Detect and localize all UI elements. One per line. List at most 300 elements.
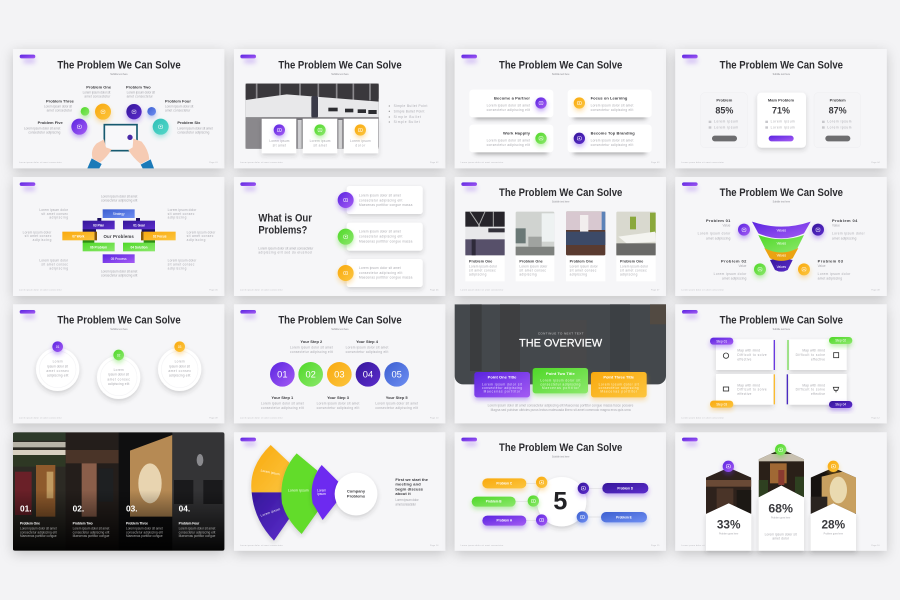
heading: Problems? (258, 224, 308, 236)
funnel labels: Problem 01 (706, 218, 731, 223)
numbered circles: 05 (391, 370, 402, 380)
plan card 87%: 87% (829, 105, 847, 115)
surrounding notes: Lorem ipsum dolor (23, 230, 51, 234)
slide 7: four photo cards: Lorem ipsum dolor sit amet consectetur (461, 289, 504, 292)
column captions: consectetur adipiscing elit (73, 530, 109, 534)
circle three (158, 341, 201, 391)
slide 10: five steps (234, 304, 445, 423)
slide 3: four cards: Page 03 (651, 162, 660, 164)
house 33% (706, 461, 751, 551)
fan segments (251, 445, 338, 541)
hub circle with 5 (537, 477, 586, 526)
photo captions: Problem One (620, 259, 643, 263)
step labels: consectetur adipiscing elit (375, 406, 418, 410)
funnel labels: amet adipiscing (832, 236, 857, 240)
funnel labels: Problem 04 (832, 218, 858, 223)
slide 8: funnel: Subtitle text here (773, 201, 791, 204)
column captions: consectetur adipiscing elit (179, 530, 215, 534)
title: The Problem We Can Solve (720, 59, 843, 71)
cross of colored bars: 01 Goal (133, 223, 145, 227)
four cards: Lorem ipsum dolor sit amet (591, 138, 633, 142)
three text cards with icons: consectetur adipiscing elit (359, 271, 402, 275)
slide 3: four cards (455, 49, 666, 168)
three text cards with icons: Lorem ipsum dolor sit amet (359, 230, 401, 234)
house 68%: Problem goes here (771, 517, 791, 520)
four cards: Focus on Learning (591, 95, 628, 100)
problem labels: amet consectetur (127, 94, 153, 98)
house 68% (759, 444, 804, 551)
numbered circles: 02 (305, 370, 316, 380)
step labels: Lorem ipsum dolor sit amet (290, 346, 333, 350)
problem labels: Lorem ipsum dolor sit amet (24, 126, 60, 130)
photo 1 (465, 212, 505, 281)
three colored cards: consectetur adipiscing (599, 386, 639, 390)
photo columns (13, 432, 224, 551)
photo captions: sit amet consec (519, 268, 546, 272)
circle three: ipsum dolor sit (169, 364, 190, 368)
cards (716, 339, 847, 405)
slide 5: our problems cross diagram: Lorem ipsum dolor sit amet consectetur (19, 289, 62, 292)
problem pills: Problem B (486, 500, 502, 504)
surrounding notes: Lorem ipsum dolor (39, 258, 68, 262)
three text cards with icons: consectetur adipiscing elit (359, 235, 402, 239)
circle two: Lorem (114, 368, 124, 372)
slide 4: three percentage plans: Subtitle text here (773, 73, 791, 76)
slide 13: four dark photo columns (13, 432, 224, 551)
funnel labels: Lorem ipsum dolor (832, 232, 865, 236)
column captions: 02. (73, 504, 84, 514)
slide 9: three circles: Subtitle text here (110, 328, 128, 331)
slide 15: number five hub: Subtitle text here (552, 456, 570, 459)
problem pills: Problem C (496, 481, 513, 485)
card text: Map with mind (802, 349, 825, 353)
funnel labels: amet adipiscing (818, 277, 842, 281)
slide 12: four step cards: Subtitle text here (773, 328, 791, 331)
heading: adipiscing elit sed do eiusmod (258, 251, 312, 255)
cross of colored bars: 07 Work (72, 234, 85, 238)
circle one: 01 (56, 345, 60, 349)
overview heading (519, 332, 602, 350)
surrounding notes: sit amet consec (25, 234, 52, 238)
step labels: consectetur adipiscing elit (346, 350, 388, 354)
surrounding notes: Lorem ipsum dolor (187, 230, 215, 234)
house 28%: Problem goes here (824, 533, 844, 536)
cross of colored bars: 02 Focus (153, 234, 167, 238)
slide 9: three circles: Page 09 (209, 417, 219, 419)
house 33%: Problem goes here (719, 533, 739, 536)
three white cards: sit amet (273, 143, 286, 147)
slide 4: three percentage plans (675, 49, 887, 168)
cross of colored bars: 06 Problem (90, 245, 107, 249)
fan segments: Lorem ipsum (260, 507, 281, 518)
cross of colored bars (62, 209, 176, 263)
photo captions: Problem One (519, 259, 543, 263)
step pills: Step 01 (716, 339, 727, 343)
slide 12: four step cards: Page 12 (871, 417, 880, 419)
bullet list: Simple Bullet (394, 120, 420, 124)
funnel bands: Values (777, 265, 786, 269)
slide 11: the overview (455, 304, 666, 423)
step pills (710, 337, 852, 408)
plan card 85%: Lorem ipsum (714, 120, 738, 124)
three colored cards (474, 368, 647, 397)
card text: effective (737, 392, 752, 396)
surrounding notes: adipiscing (49, 266, 68, 270)
slide 16: three house photos with percentages: Lorem ipsum dolor sit (681, 544, 705, 547)
top two rows of slides, left pair (13, 49, 445, 296)
four cards: consectetur adipiscing elit (487, 143, 530, 147)
surrounding notes: Lorem ipsum dolor (168, 258, 196, 262)
step pills: Step 02 (835, 339, 846, 343)
plan card 85% (701, 93, 747, 148)
photo captions: adipiscing (469, 272, 487, 276)
hub icons (528, 477, 589, 526)
title: The Problem We Can Solve (57, 315, 181, 327)
plan card 85%: Problem (716, 97, 733, 102)
title: The Problem We Can Solve (278, 59, 402, 71)
problem labels: Lorem ipsum dolor sit (165, 104, 193, 108)
problem labels: Lorem ipsum dolor sit amet (177, 126, 213, 130)
four cards: consectetur adipiscing elit (591, 108, 633, 112)
surrounding notes: Lorem ipsum dolor (168, 208, 196, 212)
slide 15: number five hub (455, 432, 666, 551)
slide 1: problem circles around tablet: Page 01 (209, 162, 218, 164)
photo captions: sit amet consec (620, 268, 647, 272)
funnel bands: Values (777, 242, 786, 246)
slide 9: three circles (13, 304, 224, 423)
four cards: Lorem ipsum dolor sit amet (487, 103, 530, 107)
problem labels: Lorem ipsum dolor sit (83, 90, 110, 94)
three text cards with icons: consectetur adipiscing elit (359, 198, 402, 202)
surrounding notes: adipiscing (49, 216, 68, 220)
problem pills: Problem E (616, 515, 632, 519)
photo 2 (516, 212, 554, 281)
card text: Difficult to solve (796, 353, 825, 357)
slide 8: funnel: Page 08 (871, 290, 881, 292)
column captions: 04. (179, 504, 190, 514)
funnel labels: amet adipiscing (706, 236, 731, 240)
three white cards: sit amet (313, 143, 327, 147)
problem labels: Problem One (86, 84, 112, 89)
three colored cards: Lorem ipsum dolor sit (540, 379, 580, 383)
problem labels: amet consectetur (47, 108, 72, 112)
funnel labels: Value (722, 224, 731, 228)
plan card 71% (757, 93, 806, 148)
surrounding notes: sit amet consec (41, 212, 68, 216)
column captions: Maecenas porttitor congue (73, 534, 110, 538)
problem labels: Problem Two (126, 84, 151, 89)
photo captions: sit amet consec (469, 268, 496, 272)
three white cards: Lorem ipsum (350, 139, 371, 143)
center circle (335, 473, 377, 515)
four cards (469, 90, 652, 154)
connectors (516, 483, 602, 521)
bottom two rows of slides, right pair (455, 304, 887, 551)
problem labels: Problem Six (177, 120, 201, 125)
slide 8: funnel (675, 177, 887, 296)
slide 7: four photo cards: Page 07 (651, 290, 659, 292)
card text: Map with mind (737, 383, 760, 387)
circle three: 03 (178, 345, 182, 349)
photo captions: adipiscing (519, 272, 537, 276)
house 28% (811, 461, 856, 551)
four cards: consectetur adipiscing elit (591, 143, 633, 147)
four cards: Lorem ipsum dolor sit amet (487, 138, 530, 142)
column captions: consectetur adipiscing elit (126, 530, 163, 534)
funnel labels: Lorem ipsum dolor (818, 272, 850, 276)
icon circles (71, 104, 169, 135)
bullet list: Simple Bullet Point (394, 104, 427, 108)
step labels: Lorem ipsum dolor sit amet (317, 401, 359, 405)
plan card 87% (814, 93, 861, 148)
fan segments: Lorem (317, 488, 327, 492)
slide 7: four photo cards: Subtitle text here (552, 201, 570, 204)
three white cards: dolor (355, 143, 365, 147)
slide 15: number five hub: Lorem ipsum dolor sit amet consectetur (461, 544, 504, 547)
card icons (723, 353, 839, 392)
circle two: ipsum dolor sit (108, 373, 129, 377)
three text cards with icons (338, 186, 423, 287)
column captions: Problem One (20, 522, 40, 526)
slide 4: three percentage plans: Lorem ipsum dolor sit amet consectetur (681, 161, 724, 164)
bottom two rows of slides, left pair (13, 304, 445, 551)
funnel labels: Value (832, 224, 840, 228)
circle one: amet consec (46, 369, 69, 373)
photo captions: Lorem ipsum dolor (620, 265, 648, 269)
surrounding notes: sit amet consec (187, 234, 214, 238)
funnel labels: Problem 03 (818, 258, 844, 263)
three white cards: Lorem ipsum (269, 139, 290, 143)
numbered circles: 03 (334, 370, 345, 380)
card text: effective (737, 357, 752, 361)
funnel bands: Values (777, 253, 786, 257)
plan card 87%: Problem (830, 97, 846, 102)
column captions: Problem Two (73, 522, 93, 526)
circle one: Lorem (53, 360, 63, 364)
circle two: 02 (117, 353, 121, 357)
side text (395, 477, 429, 506)
circle three: adipiscing elit (169, 374, 190, 378)
title: The Problem We Can Solve (499, 442, 622, 454)
top two rows of slides, right pair (455, 49, 887, 296)
four cards: Lorem ipsum dolor sit amet (591, 103, 633, 107)
side text: Lorem ipsum dolor (395, 498, 419, 502)
photo captions: Lorem ipsum dolor (570, 265, 598, 269)
photo captions: Lorem ipsum dolor (469, 265, 497, 269)
slide 10: five steps: Page 10 (430, 417, 439, 419)
problem labels: Problem Five (38, 120, 63, 125)
bottom note (488, 404, 634, 412)
plan card 87%: Lorem ipsum (827, 125, 852, 129)
plan card 71%: Main Problem (768, 97, 795, 102)
numbered circles (270, 362, 409, 387)
house 68%: 68% (768, 502, 793, 516)
step labels: Lorem ipsum dolor sit amet (375, 401, 418, 405)
fan segments: Lorem ipsum (260, 468, 280, 476)
card text (737, 349, 825, 396)
circle three: amet consec (168, 369, 191, 373)
photo captions: sit amet consec (570, 268, 597, 272)
photo captions: Problem One (570, 259, 593, 263)
funnel bands: Values (777, 229, 786, 233)
title: The Problem We Can Solve (499, 59, 622, 71)
funnel labels (698, 218, 865, 281)
circle one (36, 341, 79, 391)
three text cards with icons: Maecenas porttitor congue massa (359, 203, 413, 207)
center label: Our Problems (103, 234, 134, 239)
side text: about it (395, 491, 411, 496)
side text: meeting and (395, 482, 421, 487)
slide 14: company problems fan: Lorem ipsum dolor sit amet consectetur (240, 544, 283, 547)
funnel labels: Value (818, 264, 826, 268)
slide 3: four cards: Lorem ipsum dolor sit amet consectetur (461, 161, 504, 164)
circle two: adipiscing elit (108, 382, 129, 386)
funnel icons (738, 224, 824, 275)
three colored cards: Lorem ipsum dolor sit (599, 382, 639, 386)
column captions: 03. (126, 504, 138, 514)
three colored cards: consectetur adipiscing (482, 386, 522, 390)
column captions: Lorem ipsum dolor sit amet (20, 527, 57, 531)
funnel labels: amet adipiscing (722, 277, 747, 281)
three colored cards: Lorem ipsum dolor sit (482, 382, 522, 386)
funnel labels: Lorem ipsum dolor (714, 272, 746, 276)
circle one: adipiscing elit (47, 374, 68, 378)
house 68%: Lorem ipsum dolor sit (765, 532, 797, 536)
bottom note: Lorem ipsum dolor sit amet consectetur adipiscing elit Maecenas porttitor congue massa fusce posuere (488, 404, 634, 408)
three text cards with icons: Lorem ipsum dolor sit amet (359, 266, 401, 270)
circle one: ipsum dolor sit (47, 364, 68, 368)
slide 15: number five hub: Page 15 (651, 545, 660, 547)
card text: Map with mind (802, 383, 825, 387)
numbered circles: 01 (277, 370, 288, 380)
four cards: Work Happily (503, 130, 531, 135)
title: The Problem We Can Solve (720, 315, 843, 327)
cross of colored bars: Strategy (113, 212, 125, 216)
side text: amet consectetur (395, 502, 416, 506)
three colored cards: Maecenas porttitor (542, 386, 579, 390)
column captions: Lorem ipsum dolor sit amet (179, 527, 215, 531)
photo captions: adipiscing (570, 272, 587, 276)
center circle: Problems (347, 493, 366, 498)
bullet list (389, 104, 427, 124)
step labels: Your Step 5 (386, 395, 408, 400)
card text: effective (811, 357, 825, 361)
slide 5: our problems cross diagram (13, 177, 224, 296)
photo captions (469, 259, 648, 276)
funnel labels: Value (738, 264, 747, 268)
slide 2: photo with three cards: Page 02 (430, 162, 438, 164)
column captions: 01. (20, 504, 32, 514)
circle three: Lorem (175, 360, 185, 364)
surrounding notes: Lorem ipsum dolor (39, 208, 68, 212)
step labels: Your Step 3 (327, 395, 350, 400)
surrounding notes: adipiscing (168, 216, 187, 220)
surrounding notes (23, 195, 215, 277)
side text: begin discuss (395, 486, 424, 491)
four cards: consectetur adipiscing elit (487, 108, 530, 112)
slide 6: what is our problems: Page 06 (430, 290, 439, 292)
four cards: Become Top Branding (591, 130, 635, 135)
four cards: Become a Partner (494, 95, 530, 100)
building photo (246, 84, 379, 149)
plan card 87%: Lorem ipsum (827, 120, 852, 124)
step labels: consectetur adipiscing elit (290, 350, 333, 354)
surrounding notes: adipiscing (187, 238, 206, 242)
slide 4: three percentage plans: Page 04 (871, 162, 881, 164)
problem pills: Problem A (496, 519, 513, 523)
cross of colored bars: 05 Process (111, 257, 127, 261)
fan segments: Lorem ipsum (288, 488, 309, 492)
bullet list: Simple Bullet Point (394, 109, 424, 113)
three colored cards: Maecenas porttitor (600, 390, 637, 394)
tablet and hands illustration (87, 125, 154, 168)
slide 3: four cards: Subtitle text here (552, 73, 570, 76)
three text cards with icons: Lorem ipsum dolor sit amet (359, 193, 401, 197)
surrounding notes: consectetur adipiscing elit (101, 273, 137, 277)
slide 1: problem circles around tablet: Subtitle text here (110, 73, 128, 76)
step pills: Step 03 (716, 402, 727, 406)
step labels: Your Step 2 (300, 339, 323, 344)
photo captions: adipiscing (620, 272, 638, 276)
heading (258, 212, 313, 255)
problem labels: consectetur adipiscing (28, 130, 61, 134)
problem labels: amet consectetur (84, 94, 110, 98)
slide 10: five steps: Subtitle text here (331, 328, 349, 331)
surrounding notes: consectetur adipiscing elit (101, 199, 137, 203)
column captions: Maecenas porttitor congue (126, 534, 163, 538)
side text: First we start the (395, 477, 429, 482)
problem labels: Lorem ipsum dolor sit (127, 90, 155, 94)
bullet list: Simple Bullet (394, 115, 421, 119)
step labels: consectetur adipiscing elit (261, 406, 304, 410)
plan card 85%: Lorem ipsum (714, 125, 738, 129)
numbered circles: 04 (363, 370, 373, 380)
surrounding notes: sit amet consec (41, 262, 68, 266)
column captions: Problem Three (126, 522, 148, 526)
cross of colored bars: 04 Solution (130, 245, 148, 249)
slide 2: photo with three cards: Subtitle text here (331, 73, 349, 76)
funnel bands (752, 222, 811, 272)
surrounding notes: Lorem ipsum dolor sit amet (101, 269, 137, 273)
problem pills: Problem D (617, 486, 634, 490)
problem labels: Lorem ipsum dolor sit (44, 104, 72, 108)
slide 12: four step cards (675, 304, 887, 423)
three colored cards: Maecenas porttitor (484, 390, 520, 394)
column captions: consectetur adipiscing elit (20, 530, 57, 534)
surrounding notes: Lorem ipsum dolor sit amet (101, 195, 137, 199)
problem labels: Problem Four (165, 98, 191, 103)
overview heading: CONTINUE TO NEXT TEXT (538, 332, 584, 336)
column captions: Maecenas porttitor congue (20, 534, 57, 538)
slide 16: three house photos with percentages: Page 16 (871, 545, 881, 547)
problem labels: amet consectetur (165, 108, 190, 112)
column captions: Maecenas porttitor congue (179, 534, 216, 538)
plan card 71%: 71% (772, 105, 790, 115)
fan segments: ipsum (317, 492, 326, 496)
cross of colored bars: 03 Plan (93, 223, 104, 227)
slide 6: what is our problems (234, 177, 445, 296)
step labels: Your Step 1 (271, 395, 294, 400)
step labels: Lorem ipsum dolor sit amet (261, 401, 304, 405)
problem labels: consectetur adipiscing (177, 130, 210, 134)
slide 1: problem circles around tablet: Lorem ipsum dolor sit amet consectetur (19, 161, 62, 164)
bottom note: Magna sed pulvinar ultricies purus lectus malesuada libero sit amet commodo magna eros quis urna (491, 408, 631, 412)
problem labels (24, 84, 213, 134)
surrounding notes: sit amet consec (168, 212, 195, 216)
three text cards with icons: Maecenas porttitor congue massa (359, 276, 413, 280)
card text: effective (811, 392, 825, 396)
title: The Problem We Can Solve (57, 59, 181, 71)
